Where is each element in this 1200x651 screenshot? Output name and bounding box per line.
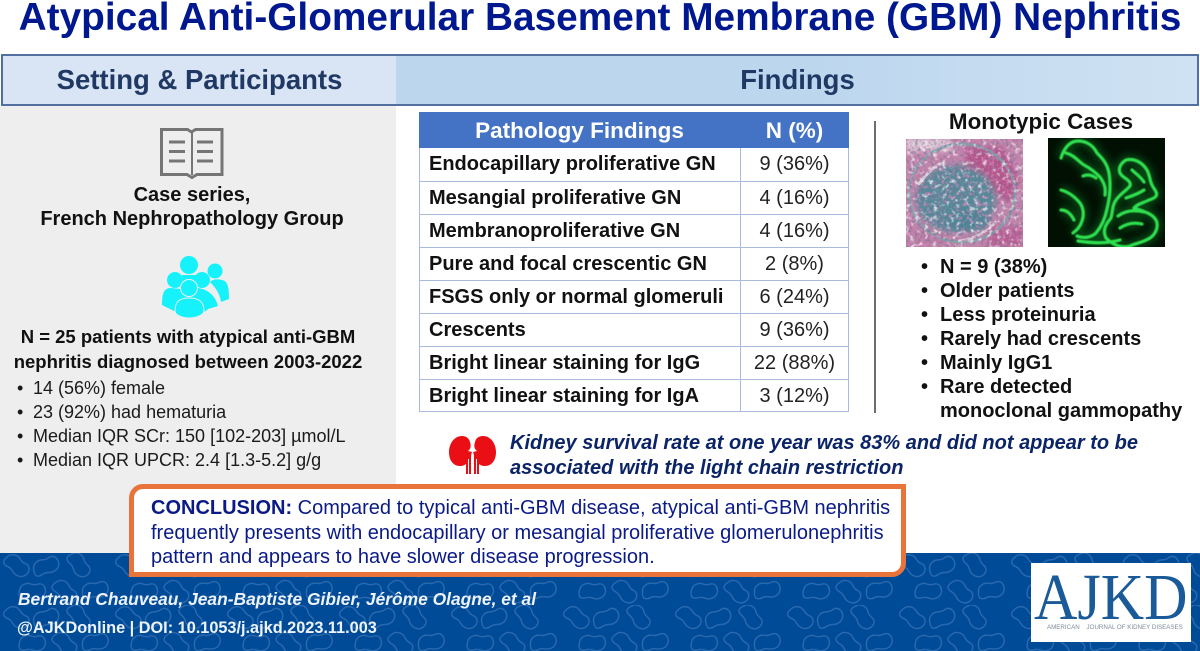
logo: AJKD: [1031, 563, 1191, 642]
table: pathology findings: 2 (8%): [765, 253, 824, 275]
table: pathology findings: FSGS only or normal glomeruli: [429, 286, 723, 308]
table: pathology findings: Bright linear staining for IgA: [429, 385, 699, 407]
panel: setting and participants background: [0, 106, 396, 554]
conclusion text: CONCLUSION: Compared to typical anti-GBM disease, atypical anti-GBM nephritis: [151, 497, 890, 519]
table: pathology findings: 4 (16%): [759, 220, 830, 242]
text: •: [17, 426, 23, 446]
text: •: [921, 304, 928, 326]
table: pathology findings: Membranoproliferative GN: [429, 220, 680, 242]
table: pathology findings: Mesangial proliferative GN: [429, 187, 681, 209]
patient characteristics list: Median IQR SCr: 150 [102-203] µmol/L: [33, 426, 346, 446]
conclusion text: frequently presents with endocapillary or mesangial proliferative glomerulonephritis: [151, 522, 884, 544]
icon: group of people: [162, 256, 229, 318]
text: •: [921, 280, 928, 302]
monotypic cases list: Rare detected: [940, 376, 1072, 398]
text: •: [921, 376, 928, 398]
patient characteristics list: 23 (92%) had hematuria: [33, 402, 226, 422]
section header bar: [1, 54, 1199, 106]
table header: N (%): [766, 118, 823, 143]
table: pathology findings: 3 (12%): [759, 385, 830, 407]
callout: kidney survival: Kidney survival rate at one year was 83% and did not appear to be: [510, 432, 1138, 454]
text: •: [17, 402, 23, 422]
text: study design: [40, 184, 344, 230]
image: immunofluorescence micrograph: [1048, 138, 1165, 247]
table: pathology findings: Bright linear staining for IgG: [429, 352, 700, 374]
table: pathology findings: 22 (88%): [754, 352, 835, 374]
heading: findings: Findings: [740, 64, 855, 95]
text: •: [921, 352, 928, 374]
heading: setting and participants: Setting & Participants: [57, 64, 342, 95]
table: pathology findings: Pure and focal crescentic GN: [429, 253, 707, 275]
logo subtitle: AMERICAN JOURNAL OF KIDNEY DISEASES: [1047, 624, 1183, 631]
text: patient count: N = 25 patients with atypical anti-GBM: [21, 326, 355, 347]
text: study design: Case series,: [134, 184, 250, 206]
image: histology micrograph: [906, 139, 1023, 247]
table: pathology findings: 9 (36%): [759, 319, 830, 341]
conclusion text: pattern and appears to have slower disease progression.: [151, 546, 655, 568]
patient characteristics list: Median IQR UPCR: 2.4 [1.3-5.2] g/g: [33, 450, 321, 470]
text: •: [921, 256, 928, 278]
monotypic cases list: Less proteinuria: [940, 304, 1096, 326]
table: pathology findings: [419, 112, 849, 412]
icon: open book: [160, 128, 224, 180]
callout: kidney survival: [510, 432, 1138, 478]
table: pathology findings: Crescents: [429, 319, 526, 341]
conclusion text: [151, 497, 890, 568]
vertical separator: [874, 121, 876, 413]
table: pathology findings: 6 (24%): [759, 286, 830, 308]
text: patient count: [14, 326, 362, 372]
icon: kidneys: [449, 436, 496, 474]
monotypic cases list: Mainly IgG1: [940, 352, 1052, 374]
patient characteristics list: [17, 378, 346, 470]
monotypic cases list: [921, 256, 1182, 422]
table: pathology findings: 4 (16%): [759, 187, 830, 209]
monotypic cases list: Older patients: [940, 280, 1074, 302]
table: pathology findings: 9 (36%): [759, 153, 830, 175]
callout: kidney survival: associated with the light chain restriction: [510, 456, 903, 478]
footer band with kidney pattern: [0, 553, 1200, 651]
logo letters: AJKD: [1034, 561, 1188, 634]
conclusion box: [129, 484, 906, 577]
citation: @AJKDonline | DOI: 10.1053/j.ajkd.2023.11.003: [17, 619, 377, 637]
text: patient count: nephritis diagnosed between 2003-2022: [14, 351, 362, 372]
table: pathology findings: Endocapillary proliferative GN: [429, 153, 716, 175]
authors: Bertrand Chauveau, Jean-Baptiste Gibier, Jérôme Olagne, et al: [18, 589, 536, 609]
patient characteristics list: 14 (56%) female: [33, 378, 165, 398]
monotypic cases list: monoclonal gammopathy: [940, 400, 1182, 422]
text: •: [17, 450, 23, 470]
monotypic cases list: Rarely had crescents: [940, 328, 1141, 350]
text: •: [17, 378, 23, 398]
monotypic cases list: N = 9 (38%): [940, 256, 1047, 278]
heading: monotypic cases: Monotypic Cases: [949, 109, 1133, 134]
text: study design: French Nephropathology Group: [40, 208, 344, 230]
table header: Pathology Findings: [475, 118, 684, 143]
table header: [419, 112, 849, 148]
text: •: [921, 328, 928, 350]
